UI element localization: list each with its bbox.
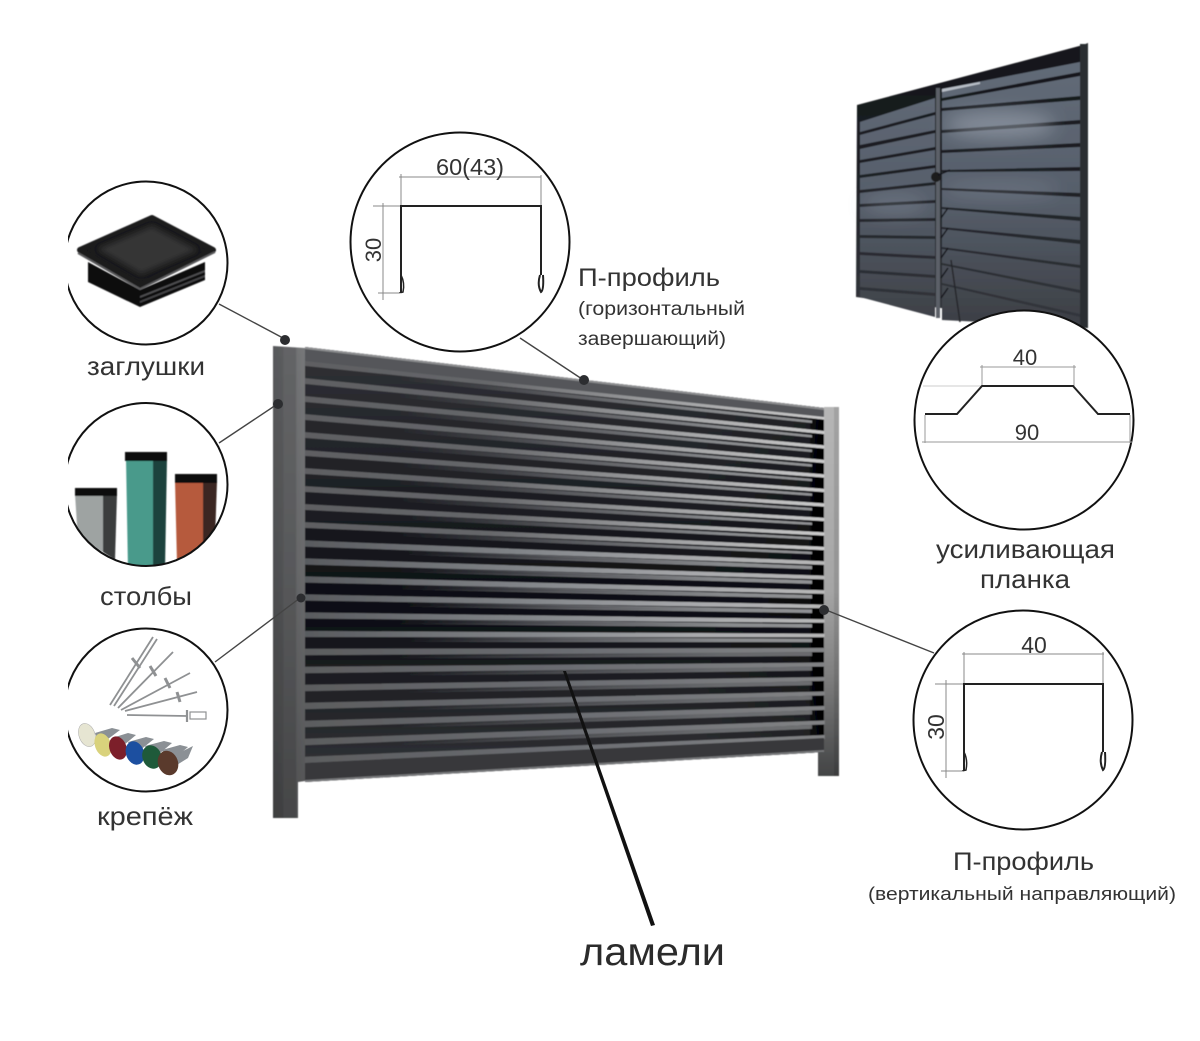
label: horizontal profile: П-профиль [578, 264, 720, 292]
label: reinforcing strip: усиливающая [936, 534, 1115, 564]
icon: rivets and roofing screws [75, 637, 206, 778]
profile drawing [401, 206, 543, 293]
icon: coloured posts [75, 452, 217, 570]
light reflections [863, 111, 1060, 215]
profile drawing [925, 386, 1130, 414]
dimension lines [935, 652, 1104, 778]
label: caps: заглушки [87, 351, 205, 381]
dimension: 60(43): 60(43) [436, 154, 504, 180]
panel: horizontal finishing U-profile [350, 132, 745, 352]
label: reinforcing strip: планка [980, 564, 1071, 594]
left fence post [273, 346, 305, 818]
label: fasteners: крепёж [97, 801, 194, 831]
label: reinforcing strip [936, 534, 1115, 594]
circle outline [350, 132, 570, 352]
louvre slats panel [305, 347, 824, 782]
right slat faces [942, 62, 1080, 327]
label: horizontal profile: завершающий) [578, 329, 726, 350]
icon: square plug cap [78, 218, 215, 307]
image: louvre panel close-up [856, 43, 1088, 328]
label: vertical profile: П-профиль [953, 848, 1094, 876]
right fence post [818, 407, 839, 776]
circle outline: posts [64, 403, 228, 566]
arrow: lamellas [563, 671, 655, 926]
panel: fasteners [64, 628, 228, 831]
panel: reinforcing strip [914, 310, 1134, 594]
label: vertical profile [868, 848, 1176, 904]
right frame edge [1080, 44, 1088, 328]
hook [400, 275, 404, 292]
label: horizontal profile [578, 264, 745, 350]
callout dots on fence [273, 335, 829, 615]
callout line: horizontal U-profile [520, 338, 582, 379]
circle outline: caps [64, 182, 228, 344]
illustration: louvre fence section [273, 346, 839, 818]
dimension lines [373, 174, 541, 300]
dimension lines [922, 365, 1132, 443]
circle outline [914, 610, 1132, 830]
label: lamellas: ламели [580, 931, 725, 974]
panel: plug caps [64, 182, 228, 381]
left slat faces [860, 98, 935, 317]
circle outline: fasteners [64, 628, 228, 792]
label: posts: столбы [100, 581, 192, 611]
central bar with knob [931, 88, 960, 322]
profile drawing [964, 684, 1105, 771]
dimension: 30: 30 [361, 238, 386, 262]
label: horizontal profile: (горизонтальный [578, 299, 745, 320]
dimension: 40: 40 [1021, 632, 1047, 658]
panel: posts [64, 403, 228, 611]
hook [963, 752, 967, 770]
circle outline [914, 310, 1134, 530]
label: vertical profile: (вертикальный направляющий) [868, 884, 1176, 904]
dimension: 40: 40 [1013, 345, 1037, 370]
panel: vertical guide U-profile [868, 610, 1176, 904]
callout line: caps [219, 304, 283, 338]
dimension: 90: 90 [1015, 420, 1039, 445]
highlight on upper slat [942, 82, 980, 92]
callout line: fasteners [215, 598, 300, 662]
callout line: posts [219, 405, 276, 443]
dimension: 30: 30 [923, 714, 949, 740]
callout line: vertical U-profile [826, 610, 934, 653]
